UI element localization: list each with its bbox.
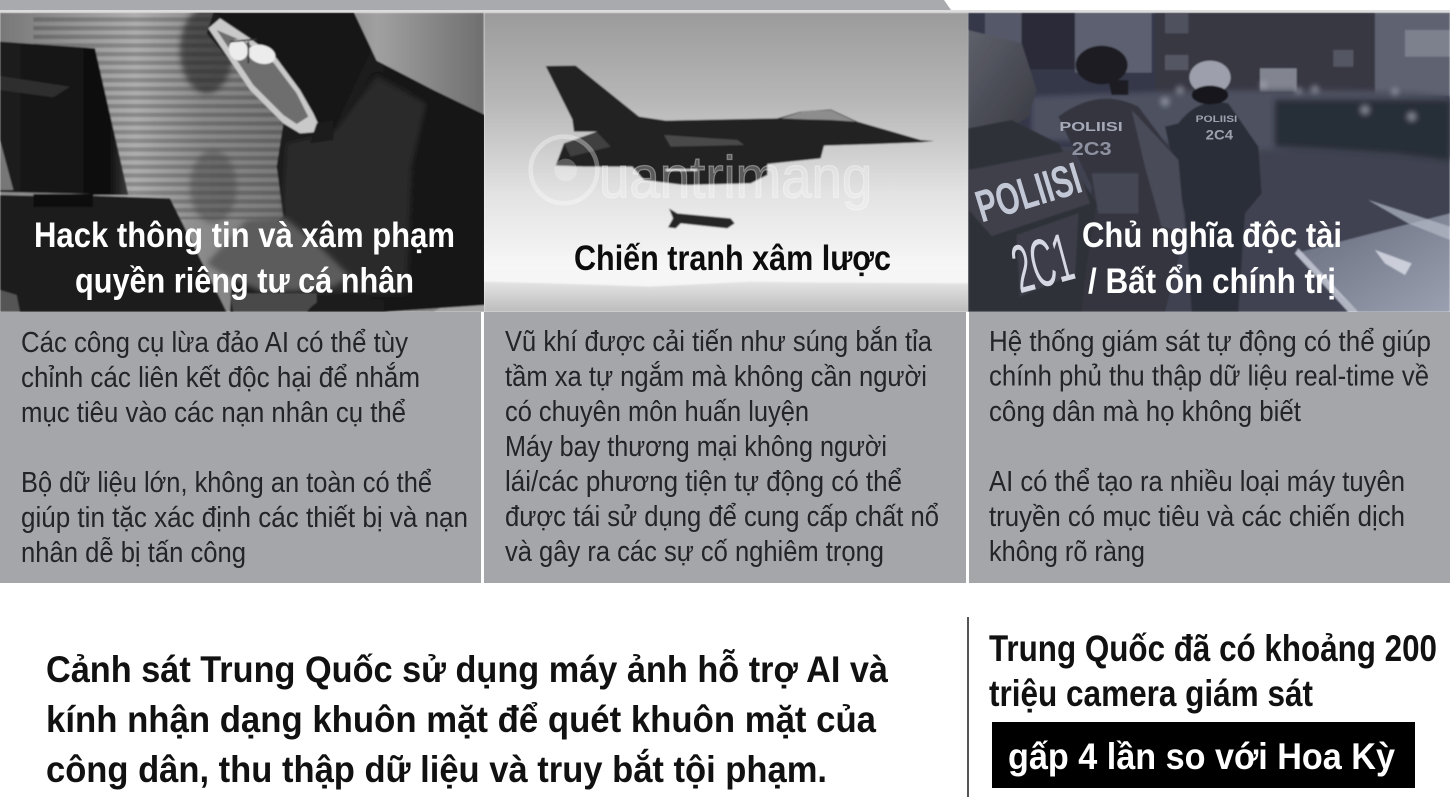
text block: authoritarianism	[989, 326, 1431, 568]
photo: fighter jet dropping a bomb	[484, 13, 969, 312]
text block: authoritarianism: AI có thể tạo ra nhiều loại máy tuyên	[989, 466, 1405, 498]
highlight box: gấp 4 lần so với Hoa Kỳ	[1008, 736, 1395, 777]
heading: hacking: Hack thông tin và xâm phạm	[34, 216, 455, 255]
text block: war: và gây ra các sự cố nghiêm trọng	[505, 536, 884, 568]
stat text: triệu camera giám sát	[989, 673, 1313, 714]
highlight box	[992, 722, 1415, 788]
text block: war: lái/các phương tiện tự động có thể	[505, 466, 902, 498]
callout: China police AI: kính nhận dạng khuôn mặt để quét khuôn mặt của	[46, 699, 876, 740]
body panel: hacking	[0, 312, 481, 583]
text block: hacking: Bộ dữ liệu lớn, không an toàn có thể	[21, 467, 432, 499]
badge lettering	[974, 116, 1236, 293]
stat text	[989, 628, 1437, 714]
text block: hacking: mục tiêu vào các nạn nhân cụ thể	[21, 397, 406, 429]
text block: war: có chuyên môn huấn luyện	[505, 396, 809, 428]
badge lettering: 2C4	[1206, 126, 1233, 142]
top band	[0, 0, 951, 10]
text block: war: được tái sử dụng để cung cấp chất nổ	[505, 501, 939, 533]
panel: hacking	[0, 7, 485, 583]
badge lettering: 2C3	[1072, 138, 1112, 159]
text block: hacking: nhân dễ bị tấn công	[21, 537, 246, 569]
text block: hacking: giúp tin tặc xác định các thiết bị và nạn	[21, 502, 468, 534]
panel: authoritarianism	[968, 13, 1450, 583]
callout: China police AI: công dân, thu thập dữ liệu và truy bắt tội phạm.	[46, 748, 827, 790]
stat: 200 million cameras	[989, 628, 1437, 788]
panel: war	[484, 13, 969, 583]
text block: war: tầm xa tự ngắm mà không cần người	[505, 361, 927, 393]
photo: hooded hacker at computer	[0, 7, 485, 312]
watermark: uantrimang	[599, 143, 872, 210]
watermark	[531, 137, 872, 210]
text block: war	[505, 326, 939, 568]
text block: authoritarianism: không rõ ràng	[989, 536, 1145, 568]
text block: war: Vũ khí được cải tiến như súng bắn tỉa	[505, 326, 932, 358]
badge lettering: POLIISI	[1059, 119, 1123, 134]
heading: authoritarianism: / Bất ổn chính trị	[1088, 262, 1336, 301]
photo: riot police facing a crowd	[968, 13, 1450, 312]
body panel: authoritarianism	[969, 312, 1450, 583]
heading: authoritarianism	[1082, 216, 1342, 301]
callout: China police AI: Cảnh sát Trung Quốc sử dụng máy ảnh hỗ trợ AI và	[46, 649, 888, 690]
heading: war: Chiến tranh xâm lược	[574, 239, 891, 278]
text block: authoritarianism: truyền có mục tiêu và các chiến dịch	[989, 501, 1405, 533]
body panel: war	[484, 312, 966, 583]
text block: authoritarianism: công dân mà họ không biết	[989, 396, 1301, 428]
badge lettering: POLIISI	[1196, 114, 1237, 124]
heading: authoritarianism: Chủ nghĩa độc tài	[1082, 216, 1342, 255]
text block: hacking: Các công cụ lừa đảo AI có thể tùy	[21, 327, 409, 359]
text block: hacking	[21, 327, 468, 569]
heading: hacking	[34, 216, 455, 300]
text block: hacking: chỉnh các liên kết độc hại để nhắm	[21, 362, 420, 394]
text block: war: Máy bay thương mại không người	[505, 431, 887, 463]
badge lettering: 2C1	[1004, 219, 1081, 308]
vertical divider	[967, 617, 969, 797]
callout: China police AI	[46, 649, 888, 790]
heading: hacking: quyền riêng tư cá nhân	[75, 262, 414, 300]
badge lettering: POLIISI	[970, 152, 1087, 232]
